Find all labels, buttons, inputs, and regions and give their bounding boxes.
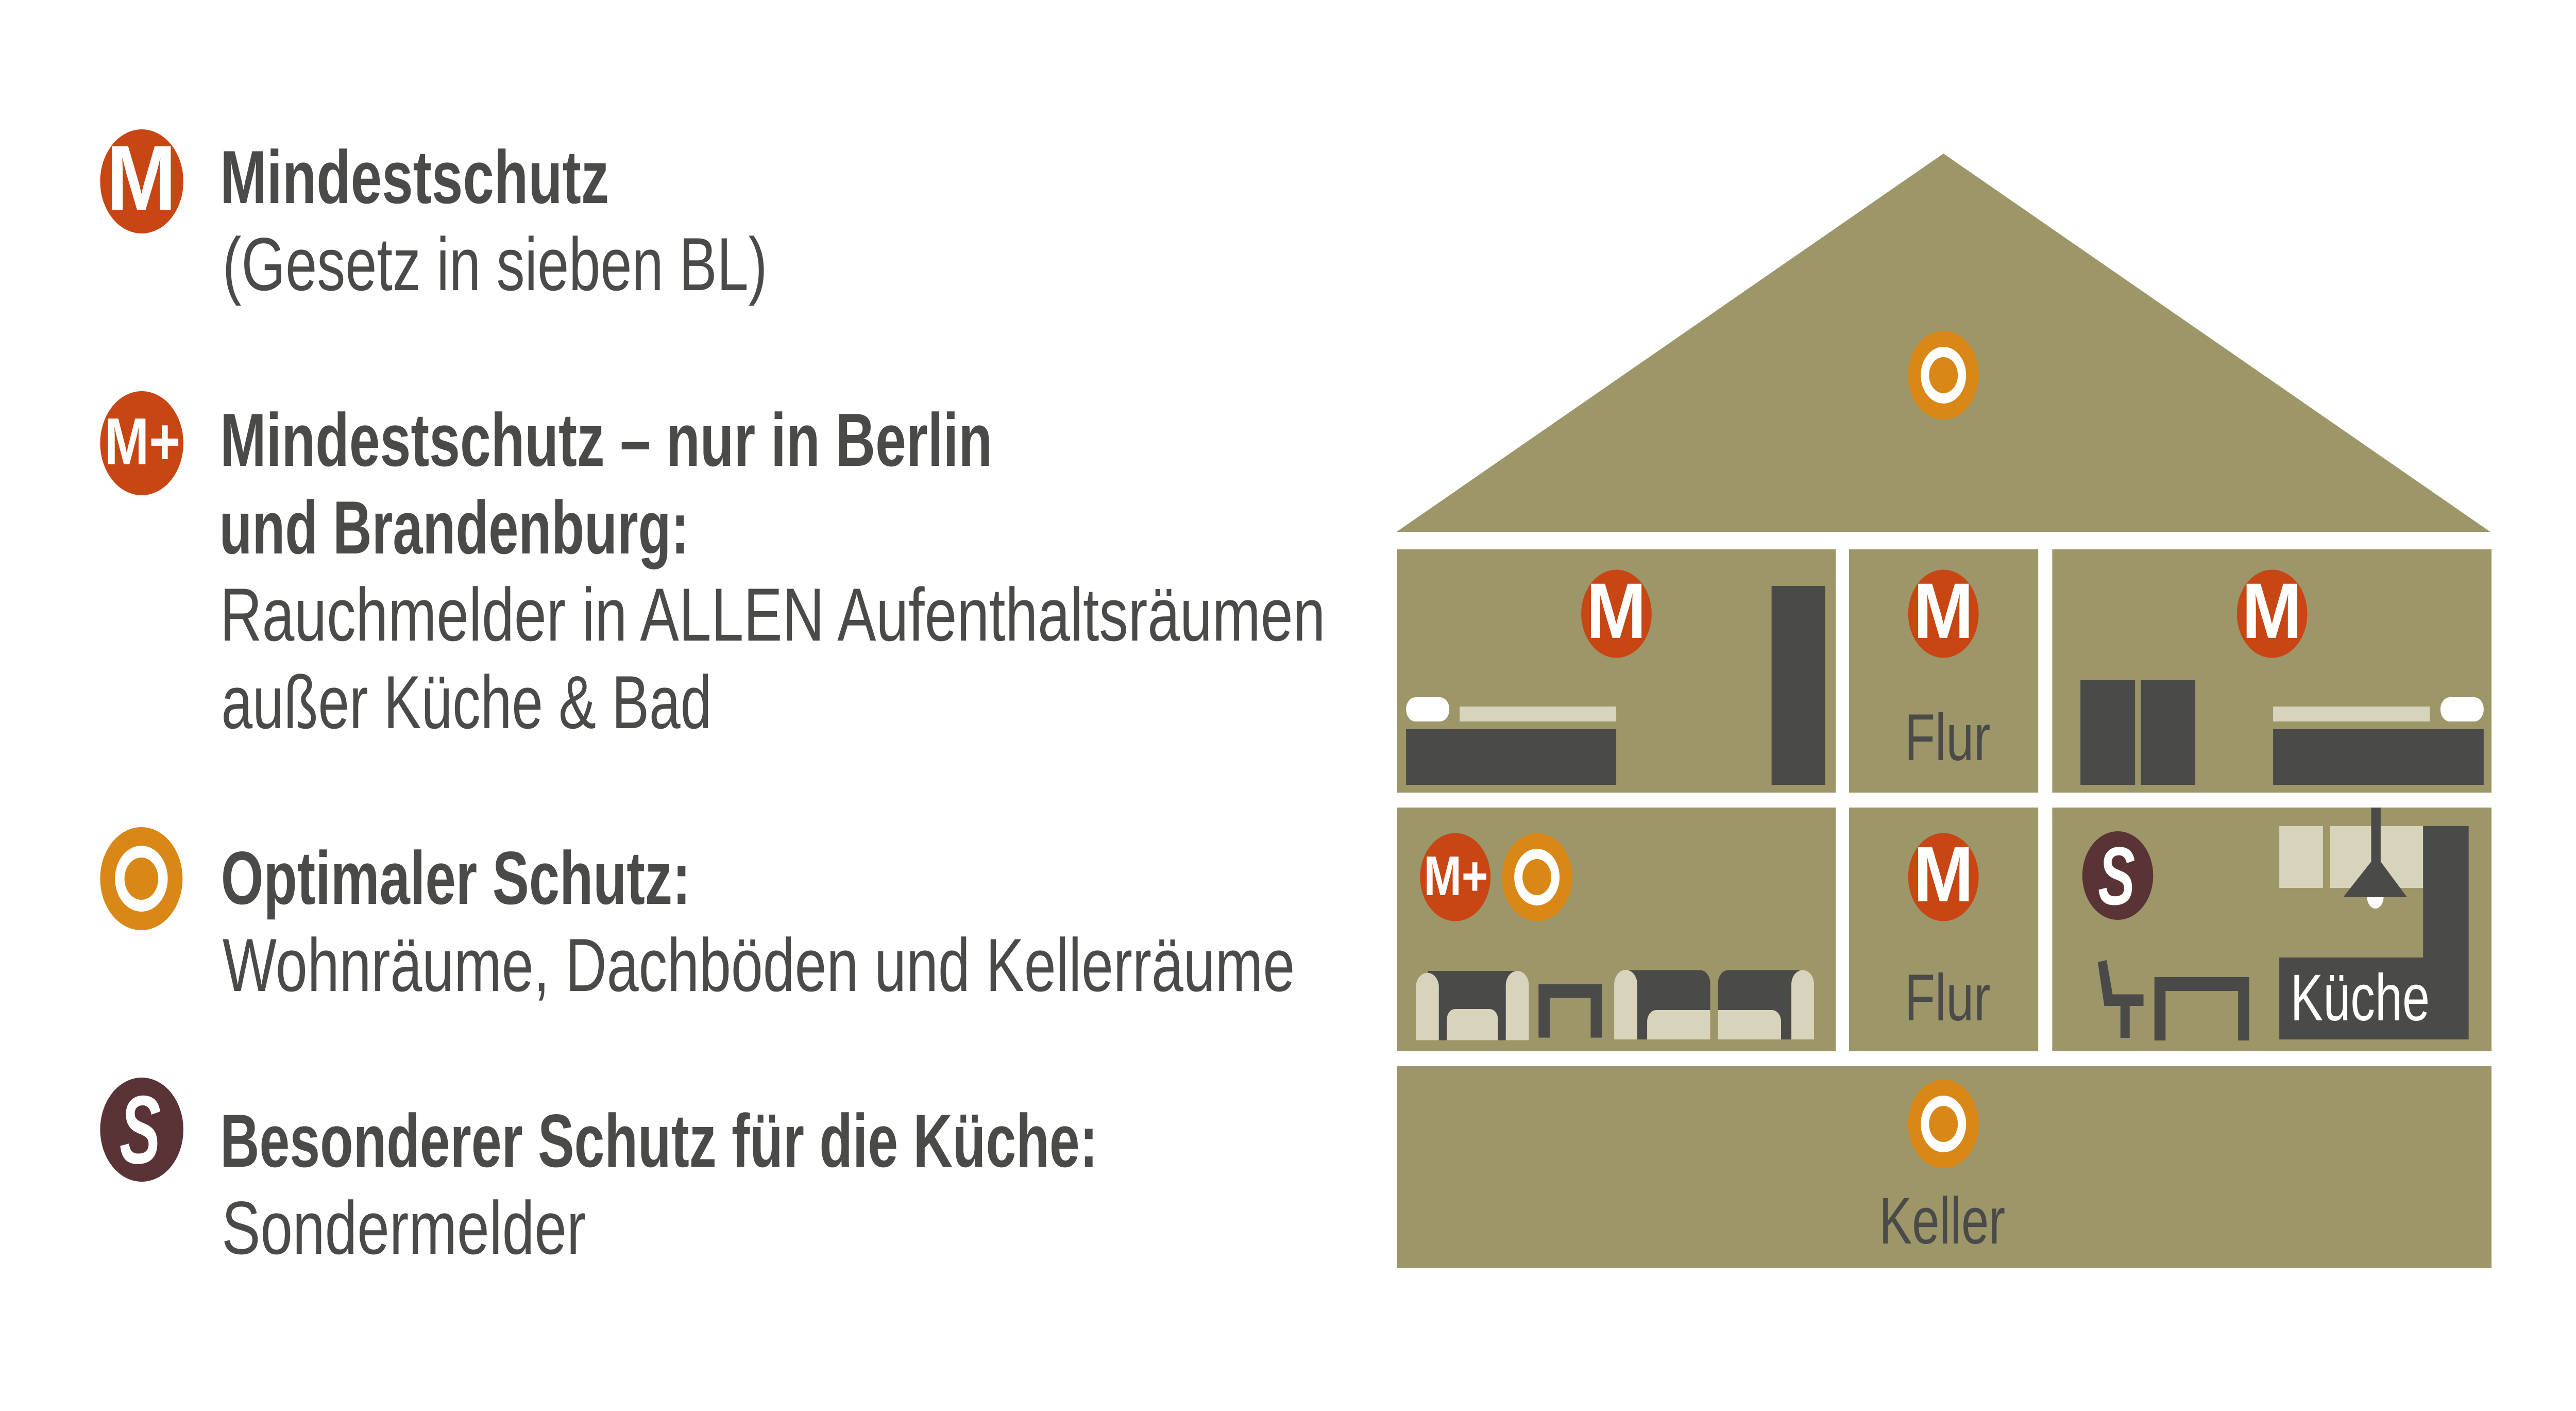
label: Flur: Flur: [1905, 700, 1990, 775]
text: Sondermelder: Sondermelder: [222, 1186, 586, 1270]
kitchen counter: [2279, 826, 2469, 1039]
room: cellar: [1397, 1066, 2492, 1268]
icon: M+ badge: [100, 391, 183, 495]
icon: O badge: [100, 827, 182, 930]
armchair: [1416, 971, 1529, 1040]
label: Küche: Küche: [2291, 961, 2430, 1035]
icon: O badge: [1908, 1080, 1979, 1168]
room: living room: [1397, 808, 1836, 1051]
label: Flur: Flur: [1905, 961, 1990, 1035]
icon: O badge roof: [1908, 331, 1979, 419]
room: kitchen: [2052, 808, 2492, 1051]
sofa left: [1614, 970, 1710, 1039]
roof: [1397, 154, 2490, 532]
bed left: [1406, 697, 1616, 785]
heading: Mindestschutz: Mindestschutz: [220, 136, 609, 220]
panel: legend: [100, 127, 1325, 1270]
text: außer Küche und Bad: außer Küche & Bad: [222, 661, 711, 745]
sofa right: [1718, 970, 1814, 1039]
label: Keller: Keller: [1879, 1184, 2005, 1258]
icon: M badge: M: [1913, 831, 1974, 918]
icon: M badge: M: [2242, 567, 2302, 655]
icon: M badge: M: [1586, 567, 1646, 655]
icon: S badge: [2082, 830, 2153, 922]
icon: O badge: [1502, 833, 1572, 921]
legend item: Mindestschutz plus: [100, 391, 1325, 745]
icon: M+ badge: [1420, 833, 1490, 921]
wardrobe narrow: [1772, 586, 1825, 785]
panel: house: [1397, 154, 2492, 1268]
icon: S badge: [100, 1076, 183, 1184]
heading: Optimaler Schutz: Optimaler Schutz:: [221, 836, 691, 920]
text: Rauchmelder in allen Aufenthaltsräumen: Rauchmelder in ALLEN Aufenthaltsräumen: [220, 573, 1325, 657]
legend item: Besonderer Schutz: [100, 1076, 1098, 1270]
icon: M badge: M: [1913, 567, 1974, 655]
coffee table: [1538, 984, 1602, 1038]
icon: S badge: S: [2098, 830, 2135, 922]
dining table: [2155, 977, 2249, 1040]
heading: Mindestschutz nur in Berlin: Mindestschutz – nur in Berlin: [220, 398, 992, 482]
wardrobe double: [2080, 680, 2195, 785]
chair: [2098, 960, 2144, 1038]
bed right: [2273, 697, 2484, 785]
text: Wohnräume, Dachböden und Kellerräume: Wohnräume, Dachböden und Kellerräume: [223, 923, 1295, 1007]
room: bedroom right: [2052, 549, 2492, 793]
heading: und Brandenburg: und Brandenburg:: [219, 486, 689, 570]
icon: M+ badge: M+: [104, 404, 180, 479]
heading: Besonderer Schutz für die Küche: Besonderer Schutz für die Küche:: [220, 1099, 1098, 1183]
text: Gesetz in sieben BL: (Gesetz in sieben BL): [223, 223, 767, 307]
lamp: [2343, 808, 2407, 909]
room: bedroom left: [1397, 549, 1836, 793]
icon: M badge: M: [106, 127, 176, 230]
legend item: Mindestschutz: [100, 127, 767, 307]
room: hallway upper: [1849, 549, 2038, 793]
icon: M+ badge: M+: [1424, 845, 1488, 907]
legend item: Optimaler Schutz: [100, 827, 1295, 1007]
icon: S badge: S: [120, 1076, 161, 1184]
room: hallway lower: [1849, 808, 2038, 1051]
wall cabinets: [2279, 826, 2423, 888]
